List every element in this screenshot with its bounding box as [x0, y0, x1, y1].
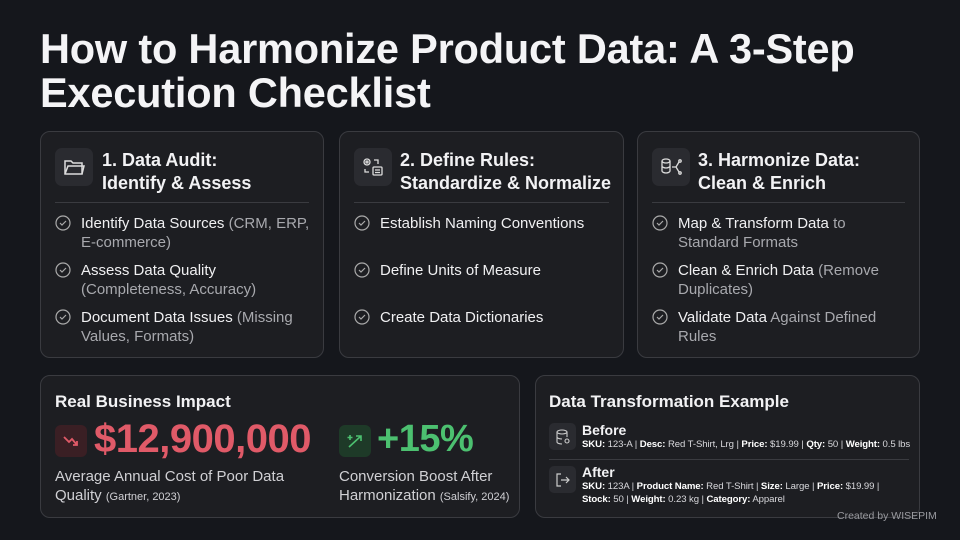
caption: Average Annual Cost of Poor Data Quality (Gartner, 2023) — [55, 468, 284, 504]
item: Define Units of Measure — [380, 262, 541, 279]
icon: trend up — [339, 425, 371, 457]
item: Identify Data Sources (CRM, ERP, E-commerce) — [81, 215, 309, 251]
stat: cost: $12,900,000 — [94, 417, 311, 461]
icon: database — [549, 423, 576, 450]
heading: Real Business Impact — [55, 392, 231, 411]
panel: business impact — [40, 375, 520, 518]
heading — [400, 150, 611, 193]
heading: 3. Harmonize Data: — [698, 150, 860, 170]
heading — [698, 150, 860, 193]
icon: trend down — [55, 425, 87, 457]
after: SKU: 123A | Product Name: Red T-Shirt | Size: Large | Price: $19.99 | — [582, 481, 879, 492]
heading — [102, 150, 251, 193]
heading: Identify & Assess — [102, 173, 251, 193]
item: Validate Data Against Defined Rules — [678, 309, 876, 345]
icon: folder — [55, 148, 93, 186]
item: Map & Transform Data to Standard Formats — [678, 215, 846, 251]
before: Before — [582, 422, 626, 438]
stat: conversion: +15% — [377, 418, 473, 460]
after — [582, 464, 879, 505]
heading: Standardize & Normalize — [400, 173, 611, 193]
item: Clean & Enrich Data (Remove Duplicates) — [678, 262, 879, 298]
title: Execution Checklist — [40, 69, 431, 116]
icon: export — [549, 466, 576, 493]
heading: Clean & Enrich — [698, 173, 826, 193]
panel: transformation example — [535, 375, 920, 518]
item: Create Data Dictionaries — [380, 309, 543, 326]
heading: 2. Define Rules: — [400, 150, 535, 170]
panel: step 2 — [339, 131, 624, 358]
before — [582, 422, 910, 450]
item: Establish Naming Conventions — [380, 215, 584, 232]
item: Document Data Issues (Missing Values, Formats) — [81, 309, 293, 345]
icon: data flow — [652, 148, 690, 186]
credit: Created by WISEPIM — [837, 510, 937, 522]
panel: step 1 — [40, 131, 324, 358]
after: After — [582, 464, 615, 480]
item: Assess Data Quality (Completeness, Accuracy) — [81, 262, 256, 298]
caption: Conversion Boost After Harmonization (Salsify, 2024) — [339, 468, 509, 504]
before: SKU: 123-A | Desc: Red T-Shirt, Lrg | Price: $19.99 | Qty: 50 | Weight: 0.5 lbs — [582, 439, 910, 450]
title — [40, 25, 855, 116]
heading: 1. Data Audit: — [102, 150, 217, 170]
after: Stock: 50 | Weight: 0.23 kg | Category: Apparel — [582, 494, 785, 505]
title: How to Harmonize Product Data: A 3-Step — [40, 25, 855, 72]
icon: gear rules — [354, 148, 392, 186]
panel: step 3 — [637, 131, 920, 358]
heading: Data Transformation Example — [549, 392, 789, 411]
